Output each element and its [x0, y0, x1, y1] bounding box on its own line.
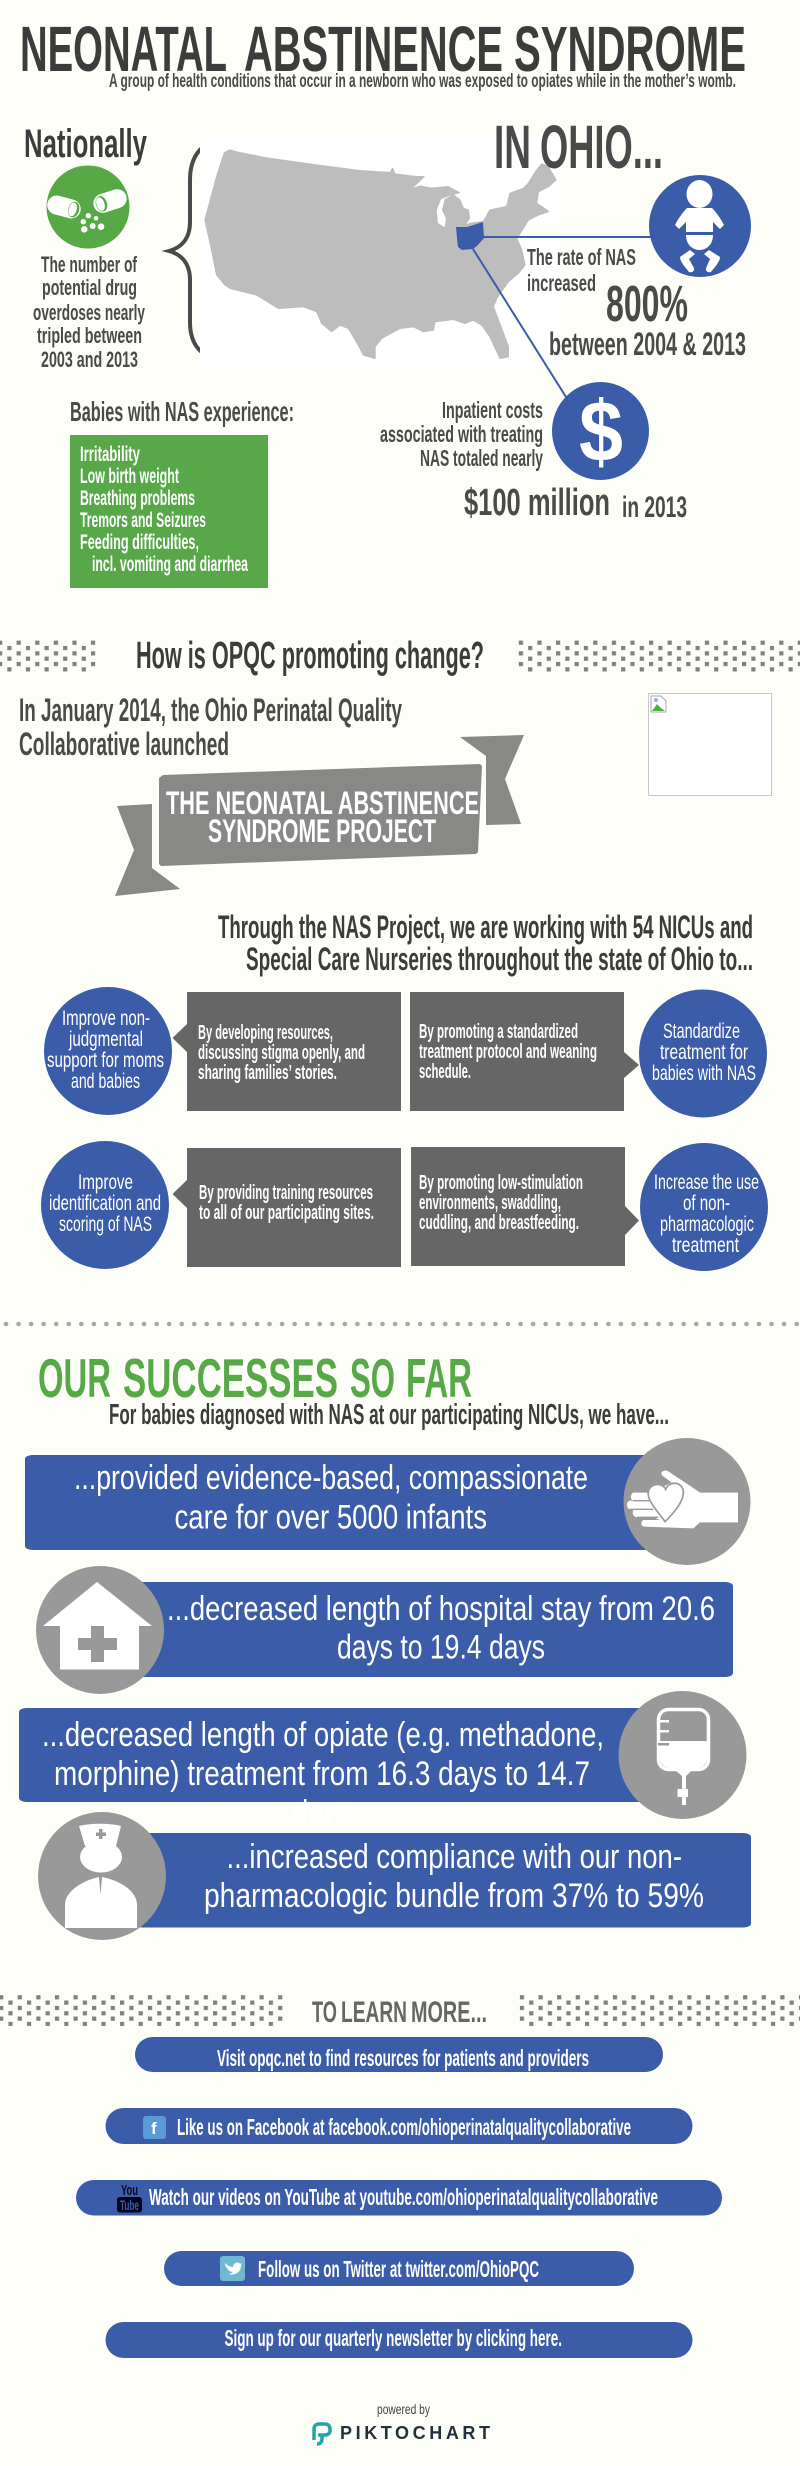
text: overdoses: overdoses nearly [33, 300, 145, 325]
bar: compassionate care: care for over 5000 infants [174, 1498, 487, 1536]
heading: to learn more: LEARN [341, 1996, 407, 2029]
bar: hospital stay [36, 1566, 733, 1694]
button: newsletter [106, 2322, 692, 2358]
panel: non-judgmental support: support for moms [47, 1049, 164, 1072]
panel: standardize treatment: schedule. [419, 1061, 471, 1083]
panel: identification and scoring: identification and [49, 1192, 161, 1215]
panel: standardize treatment: treatment for [660, 1041, 748, 1064]
heading: our successes: OUR [38, 1347, 111, 1409]
text: rate of NAS: The rate of NAS [527, 244, 636, 270]
button: visit opqc [135, 2037, 663, 2072]
text: inpatient costs: Inpatient costs [442, 397, 543, 423]
text: january 2014: In January 2014, the Ohio Perinatal Quality [19, 692, 402, 728]
heading: in ohio [494, 113, 663, 181]
panel: non-pharmacologic treatment: pharmacologic [660, 1213, 754, 1236]
ribbon banner [115, 735, 524, 896]
icon: baby [649, 175, 751, 277]
bar: opiate treatment: ...decreased length of opiate (e.g. methadone, [42, 1716, 604, 1754]
panel: standardize treatment: Standardize [663, 1020, 740, 1043]
panel: non-pharmacologic treatment: of non- [683, 1192, 730, 1215]
panel: standardize treatment [410, 990, 767, 1118]
icon: twitter [220, 2256, 245, 2281]
text: overdoses: potential drug [42, 275, 137, 300]
bar: opiate treatment: days [293, 1794, 351, 1832]
ribbon text [166, 785, 479, 849]
heading: in ohio: IN [494, 113, 531, 181]
brace [169, 140, 217, 360]
panel: symptoms: Breathing problems [80, 487, 195, 510]
text: overdoses: The number of [41, 252, 137, 277]
panel: non-pharmacologic treatment: environments, swaddling, [419, 1192, 561, 1214]
text: inpatient costs: NAS totaled nearly [420, 445, 543, 471]
stat: 800%: 800% [606, 275, 688, 332]
ribbon text: SYNDROME PROJECT [208, 813, 436, 849]
connector: ohio to dollar [473, 249, 566, 397]
bar: compassionate care: ...provided evidence-based, compassionate [74, 1459, 588, 1497]
bar: opiate treatment [19, 1691, 746, 1832]
stat: 100 million: $100 million [464, 482, 610, 524]
icon: dollar [552, 382, 649, 480]
heading: nationally: Nationally [24, 122, 147, 166]
panel: identification and scoring: to all of our participating sites. [199, 1202, 374, 1224]
map background [200, 135, 560, 367]
dots band right [517, 1995, 800, 2026]
panel: identification and scoring: scoring of NAS [59, 1213, 152, 1236]
panel: non-pharmacologic treatment: By promoting low-stimulation [419, 1172, 583, 1194]
text: overdoses: tripled between [37, 323, 142, 348]
ribbon text: THE NEONATAL ABSTINENCE [166, 785, 479, 821]
bar: compassionate care [25, 1438, 750, 1565]
panel: identification and scoring: By providing training resources [199, 1182, 373, 1204]
heading: to learn more: TO [312, 1996, 337, 2029]
panel: non-judgmental support: By developing resources, [198, 1022, 333, 1044]
panel: non-judgmental support [44, 987, 401, 1115]
icon: nurse [38, 1812, 166, 1940]
bar: non-pharmacologic bundle: ...increased compliance with our non- [226, 1838, 682, 1876]
panel: non-judgmental support: Improve non- [62, 1007, 150, 1030]
panel: non-pharmacologic treatment: cuddling, and breastfeeding. [419, 1212, 579, 1234]
text: inpatient costs: associated with treating [380, 421, 543, 447]
icon: facebook: f [151, 2119, 157, 2138]
text: january 2014 [19, 692, 402, 762]
button: twitter [164, 2251, 634, 2286]
heading: to learn more: MORE... [411, 1996, 487, 2029]
panel: standardize treatment: By promoting a standardized [419, 1021, 578, 1043]
map: ohio [456, 222, 484, 250]
button: newsletter: Sign up for our quarterly newsletter by clicking here. [224, 2325, 562, 2351]
text: through the NAS project [218, 909, 753, 977]
icon: dollar: $ [579, 384, 623, 480]
icon: youtube: Tube [120, 2197, 139, 2213]
icon: iv bag [618, 1691, 746, 1819]
text: in 2013: in 2013 [622, 491, 687, 524]
icon: facebook [143, 2116, 166, 2139]
bar: non-pharmacologic bundle: pharmacologic bundle from 37% to 59% [204, 1877, 704, 1915]
bar: hospital stay: days to 19.4 days [337, 1629, 545, 1667]
button: facebook [106, 2108, 692, 2144]
heading: how is opqc: How is OPQC promoting change? [136, 635, 484, 677]
text: rate of NAS [527, 244, 636, 296]
text: january 2014: Collaborative launched [19, 726, 229, 762]
dotted row [0, 1320, 800, 1328]
icon: youtube: You [121, 2182, 138, 2199]
heading: babies experience: Babies with NAS experience: [70, 396, 294, 427]
dots band left [0, 1995, 283, 2026]
panel: symptoms: incl. vomiting and diarrhea [92, 553, 248, 576]
heading: our successes: SUCCESSES [123, 1347, 338, 1409]
broken image placeholder [648, 694, 772, 796]
dots band left [0, 640, 96, 672]
footer: powered by: powered by [377, 2401, 430, 2417]
text: inpatient costs [380, 397, 543, 471]
title: ABSTINENCE [244, 13, 503, 85]
panel: standardize treatment: treatment protocol and weaning [419, 1041, 597, 1063]
text: overdoses: 2003 and 2013 [41, 347, 138, 372]
bar: non-pharmacologic bundle [38, 1812, 751, 1940]
title: NEONATAL [20, 13, 227, 85]
button: twitter: Follow us on Twitter at twitter.com/OhioPQC [258, 2256, 539, 2282]
panel: nationally [24, 122, 147, 372]
panel: non-judgmental support: discussing stigma openly, and [198, 1042, 365, 1064]
heading: to learn more [312, 1996, 487, 2029]
panel: symptoms: Tremors and Seizures [80, 509, 206, 532]
text: overdoses [33, 252, 145, 372]
map: united states [205, 150, 556, 358]
panel: symptoms: Low birth weight [80, 465, 179, 488]
text: rate of NAS: increased [527, 270, 596, 296]
button: youtube [76, 2180, 722, 2216]
bar: opiate treatment: morphine) treatment from 16.3 days to 14.7 [54, 1755, 590, 1793]
panel: identification and scoring [41, 1141, 401, 1269]
panel: identification and scoring: Improve [78, 1171, 133, 1194]
heading: our successes: SO [350, 1347, 395, 1409]
panel: symptoms [70, 435, 268, 588]
logo: piktochart: PIKTOCHART [340, 2423, 490, 2443]
heading: in ohio: OHIO... [540, 113, 663, 181]
panel: non-judgmental support: sharing families’ stories. [198, 1062, 337, 1084]
icon: hospital [36, 1566, 164, 1694]
title [20, 13, 746, 85]
dots band right [515, 640, 800, 672]
panel: non-pharmacologic treatment: treatment [672, 1234, 739, 1257]
icon: pills [45, 166, 129, 248]
icon: hand and heart [624, 1438, 750, 1565]
panel: symptoms: Irritability [80, 443, 140, 466]
panel: symptoms: Feeding difficulties, [80, 531, 199, 554]
panel: non-judgmental support: judgmental [68, 1028, 143, 1051]
icon: youtube [117, 2182, 142, 2213]
panel: non-judgmental support: and babies [71, 1070, 140, 1093]
heading: our successes: FAR [406, 1347, 472, 1409]
panel: non-pharmacologic treatment [411, 1143, 768, 1271]
connector: ohio to baby [482, 236, 652, 238]
